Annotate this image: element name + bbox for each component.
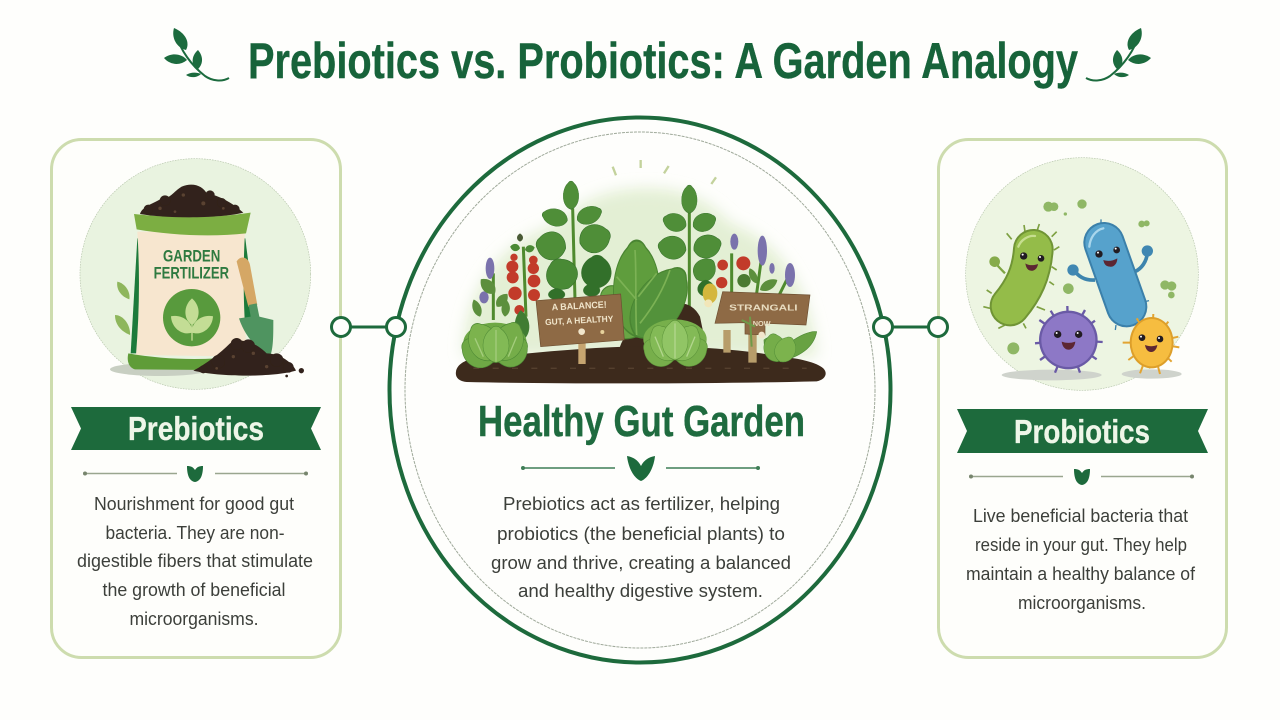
sign left: GUT, A HEALTHY [545,314,614,327]
text: prebiotics description: the growth of beneficial [102,580,286,600]
text: prebiotics description [77,494,313,629]
bacterium: green rod [983,224,1059,328]
text: center description: grow and thrive, creating a balanced [491,553,791,573]
lettuce right [761,332,817,366]
tomatoes left [506,233,540,315]
connector: left panel to center [332,318,406,336]
sign right [715,292,810,363]
text: center description: and healthy digestive system. [518,581,763,601]
banner: probiotics [957,409,1208,453]
sign left [536,294,624,364]
divider: probiotics [969,469,1194,485]
tall plant left [534,181,614,300]
sign left: A BALANCE! [551,300,607,312]
panel: healthy gut garden [390,118,890,662]
icon: left title sprig [164,28,229,80]
illustration: fertilizer bag [80,159,311,389]
text: prebiotics description: microorganisms. [130,609,258,629]
text: probiotics description [966,506,1196,613]
banner: prebiotics: Prebiotics [128,410,264,447]
tall plant right [656,185,724,297]
text: prebiotics description: digestible fibers that stimulate [77,551,313,571]
text: center description: probiotics (the beneficial plants) to [497,524,785,544]
bacterium: yellow coccus [1123,314,1179,374]
bacterium: purple virus [1035,306,1103,373]
lettuce left [455,317,535,374]
divider: center [521,456,760,481]
lavender sprigs [479,234,795,303]
illustration: fertilizer bag: GARDEN [163,246,220,265]
banner: prebiotics [71,407,321,450]
bacterium: blue rod [1067,219,1153,330]
soil bed [456,346,826,383]
central big lettuce [586,240,701,350]
panel: prebiotics [52,140,340,658]
text: probiotics description: microorganisms. [1018,593,1146,613]
connector: center to right panel [874,318,948,336]
text: center description [491,494,791,601]
text: probiotics description: reside in your gut. They help [975,535,1187,555]
text: probiotics description: maintain a healthy balance of [966,564,1196,584]
illustration: friendly bacteria [966,158,1198,390]
tomatoes right [703,256,751,307]
panel: probiotics [938,140,1226,658]
divider: prebiotics [83,466,308,482]
text: probiotics description: Live beneficial bacteria that [973,506,1188,526]
illustration: fertilizer bag: FERTILIZER [154,264,229,283]
icon: right title sprig [1086,28,1151,80]
text: prebiotics description: Nourishment for good gut [94,494,294,514]
plant stems [493,208,788,320]
sign right: STRANGALI [729,303,797,313]
banner: probiotics: Probiotics [1014,413,1150,450]
lettuce middle [638,319,713,372]
small herb leaves [470,267,780,341]
panel frame: probiotics [938,140,1226,658]
panel frame: prebiotics [52,140,340,658]
text: prebiotics description: bacteria. They are non- [106,523,284,543]
title: Prebiotics vs. Probiotics: A Garden Analogy [248,33,1078,89]
center oval frame [390,118,890,662]
text: center description: Prebiotics act as fertilizer, helping [503,494,780,514]
sign right: NOW [753,319,771,328]
illustration: vegetable garden [455,160,826,383]
dark soil behind lettuce [620,303,707,360]
heading: healthy gut garden: Healthy Gut Garden [478,397,805,446]
